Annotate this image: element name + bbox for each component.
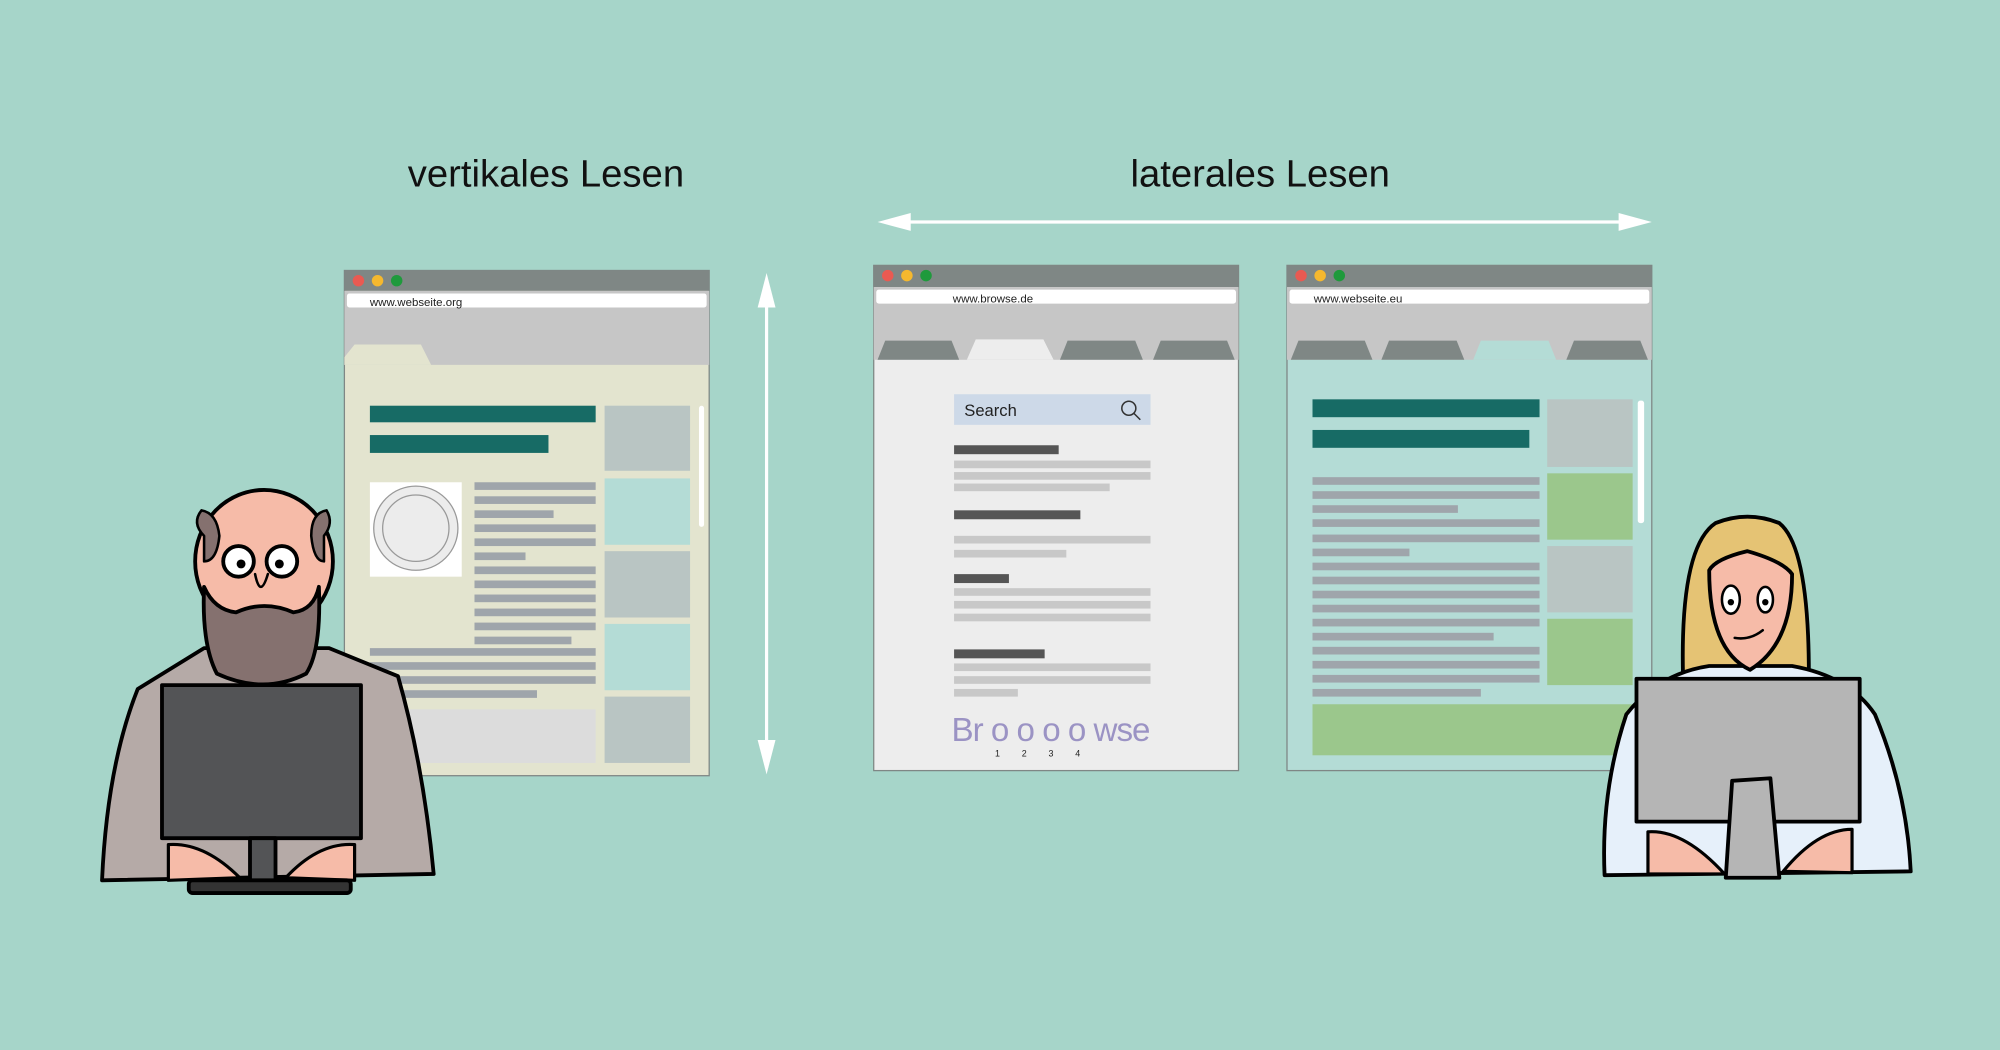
browser: www.webseite.eu bbox=[1287, 265, 1652, 771]
title: laterales Lesen: laterales Lesen bbox=[1131, 152, 1390, 195]
browser: www.webseite.org: www.webseite.org bbox=[369, 297, 462, 309]
title: vertikales Lesen: vertikales Lesen bbox=[408, 152, 684, 195]
search box: Search bbox=[964, 401, 1017, 420]
pagination text: 2 bbox=[1022, 749, 1027, 759]
pagination text: 4 bbox=[1075, 749, 1080, 759]
arrow: horizontal double bbox=[878, 213, 1652, 231]
arrow: vertical double bbox=[758, 273, 776, 774]
pagination text: 1 bbox=[995, 749, 1000, 759]
browser: www.browse.de bbox=[874, 265, 1239, 771]
character: bearded man at computer bbox=[102, 490, 434, 893]
browser: www.webseite.org bbox=[344, 270, 709, 776]
pagination text: Br o o o o wse bbox=[952, 712, 1151, 749]
browser: www.webseite.eu: www.webseite.eu bbox=[1313, 293, 1402, 305]
character: blonde woman at computer bbox=[1604, 517, 1911, 878]
browser: www.browse.de: www.browse.de bbox=[952, 293, 1033, 305]
pagination text: 3 bbox=[1049, 749, 1054, 759]
search box bbox=[954, 394, 1151, 425]
